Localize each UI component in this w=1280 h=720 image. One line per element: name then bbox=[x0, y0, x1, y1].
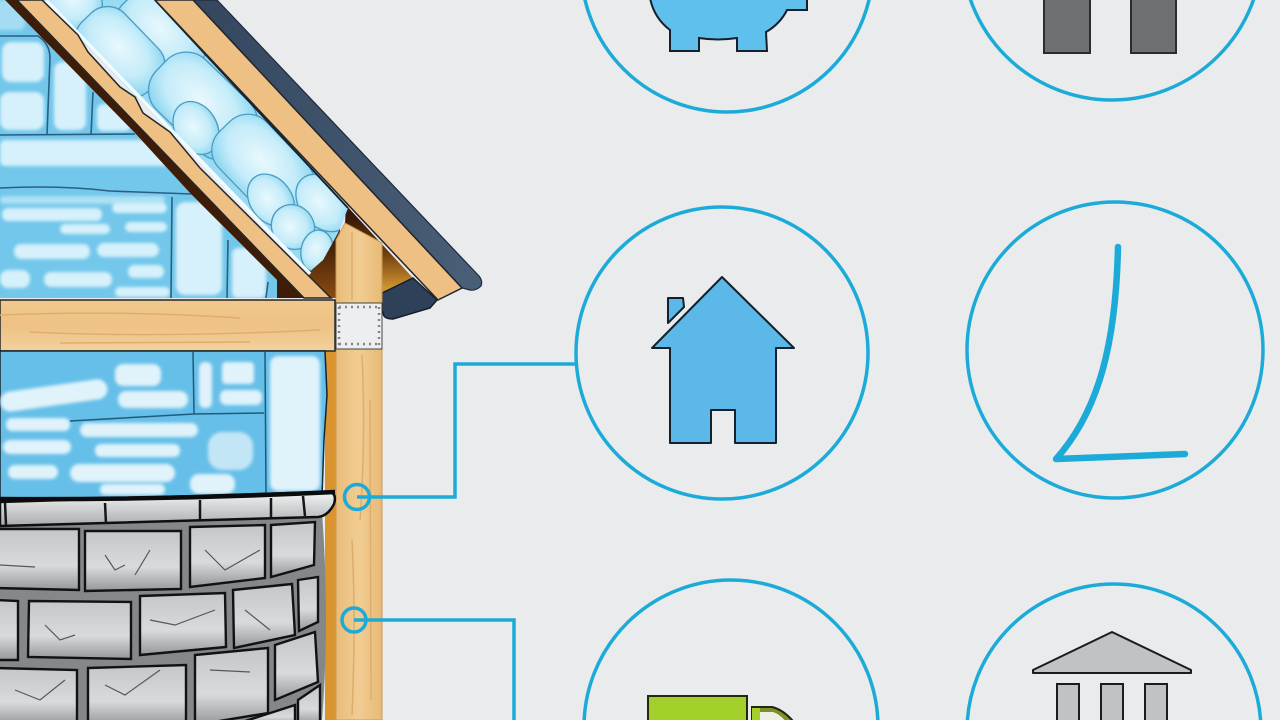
upper rafter bbox=[155, 0, 462, 300]
circle: truck bbox=[584, 580, 878, 720]
icon: bank building bbox=[1033, 632, 1191, 720]
roof soffit bbox=[382, 278, 437, 319]
circle: columns bbox=[962, 0, 1262, 100]
rafter insulation bbox=[35, 0, 361, 274]
stone curb bbox=[0, 492, 335, 526]
cavity right of post bbox=[345, 205, 413, 293]
circle: curve chart bbox=[967, 202, 1263, 498]
icon: truck bbox=[648, 696, 797, 720]
wall insulation bbox=[0, 351, 327, 502]
roof covering bbox=[193, 0, 482, 290]
connector: wall to truck circle bbox=[342, 608, 514, 720]
vertical post bbox=[325, 223, 382, 720]
icon: curve chart bbox=[1056, 247, 1185, 459]
attic insulation bbox=[0, 0, 277, 298]
icon: piggy bank bbox=[650, 0, 807, 51]
house cross-section bbox=[0, 0, 482, 720]
circle: piggy bank bbox=[581, 0, 873, 112]
cavity left of post bbox=[300, 225, 340, 298]
white joint block bbox=[336, 303, 382, 349]
circle: house bbox=[576, 207, 868, 499]
icon: house bbox=[652, 277, 794, 443]
icon: columns bbox=[1044, 0, 1176, 53]
connector: house to circle bbox=[344, 364, 576, 510]
lower rafter bbox=[17, 0, 331, 298]
rafter shadow bbox=[5, 0, 304, 298]
horizontal beam bbox=[0, 300, 335, 351]
brick wall bbox=[0, 512, 326, 720]
circle: bank building bbox=[967, 584, 1261, 720]
